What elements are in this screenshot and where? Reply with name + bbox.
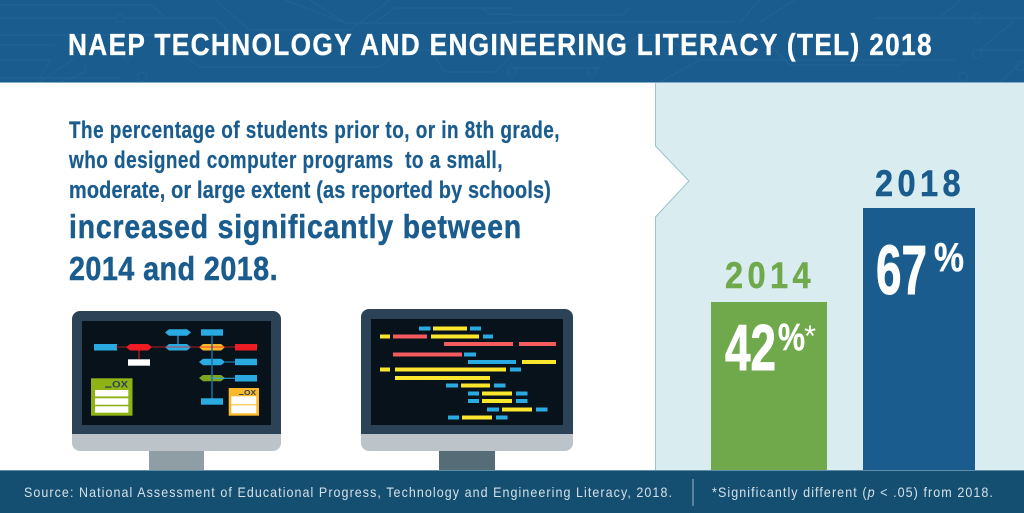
bar: 2018	[863, 163, 975, 470]
bar: 2014: 2014	[725, 255, 815, 296]
source note: Source: National Assessment of Educational Progress, Technology and Engineering Literacy, 2018.	[24, 484, 673, 500]
icon: monitor with code	[361, 309, 573, 470]
icon: monitor with flowchart	[72, 311, 281, 470]
text block: description: 2014 and 2018.	[69, 250, 278, 287]
bar: 2014: *	[804, 320, 816, 353]
bar: 2014: %	[778, 317, 805, 359]
bar: 2014	[711, 255, 827, 470]
bar: 2014: 42	[725, 311, 776, 384]
text block: description: who designed computer programs to a small,	[68, 147, 503, 174]
text block: description	[68, 117, 560, 287]
text block: description: increased significantly between	[69, 208, 522, 245]
significance note: *Significantly different (p < .05) from 2018.	[712, 484, 994, 500]
icon: monitor with flowchart: OX	[244, 390, 256, 397]
header banner	[0, 0, 1024, 83]
bar: 2018: 67	[876, 231, 927, 309]
text block: description: moderate, or large extent (as reported by schools)	[69, 177, 551, 204]
panel: results background with arrow notch	[655, 83, 1024, 470]
footer bar	[0, 470, 1024, 513]
bar: 2018: %	[934, 234, 964, 280]
bar: 2018: 2018	[875, 163, 965, 204]
icon: monitor with flowchart: OX	[112, 380, 129, 391]
text block: description: The percentage of students prior to, or in 8th grade,	[69, 117, 560, 144]
